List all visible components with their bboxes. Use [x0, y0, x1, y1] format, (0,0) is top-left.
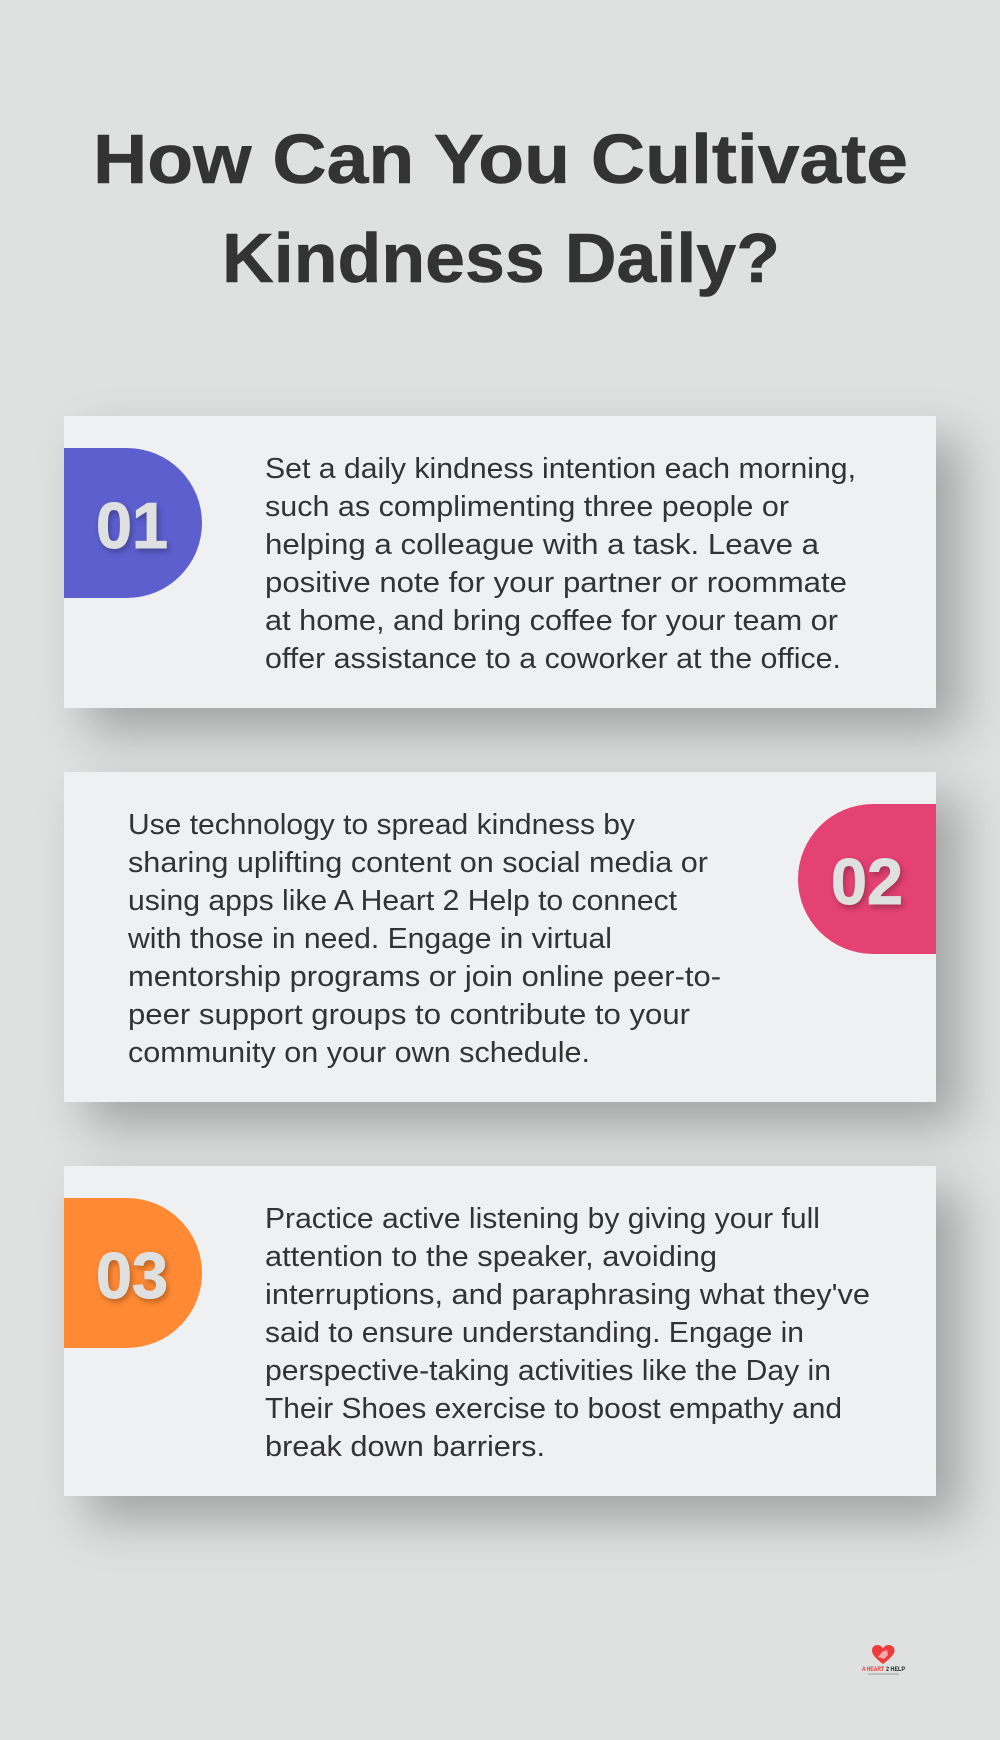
panel: step 02 — [64, 772, 936, 1102]
text: step 03 body — [265, 1203, 870, 1463]
text: step 01 body: Set a daily kindness intention each morning, — [265, 453, 856, 485]
text: step 01 body: such as complimenting three people or — [265, 491, 790, 523]
text: step 02 body: using apps like A Heart 2 Help to connect — [128, 885, 677, 917]
text: step 03 body: said to ensure understanding. Engage in — [265, 1317, 804, 1349]
logo: A Heart 2 Help: 2 HELP — [886, 1667, 905, 1673]
text: step 01 body: positive note for your partner or roommate — [265, 567, 847, 599]
badge: 03: 03 — [96, 1239, 168, 1312]
badge: 02 — [798, 804, 936, 954]
title — [93, 120, 908, 297]
badge: 03 — [64, 1198, 202, 1348]
text: step 02 body — [127, 809, 721, 1069]
text: step 03 body: Practice active listening by giving your full — [265, 1203, 820, 1235]
badge: 01: 01 — [96, 489, 168, 562]
panel: step 03 — [64, 1166, 936, 1496]
text: step 02 body: Use technology to spread kindness by — [128, 809, 636, 841]
badge: 02: 02 — [831, 845, 903, 918]
logo: A Heart 2 Help: A HEART — [862, 1667, 884, 1673]
text: step 01 body: offer assistance to a coworker at the office. — [265, 643, 841, 675]
text: step 01 body: at home, and bring coffee for your team or — [265, 605, 839, 637]
text: step 01 body — [265, 453, 856, 675]
title: Kindness Daily? — [222, 219, 780, 297]
text: step 01 body: helping a colleague with a task. Leave a — [265, 529, 819, 561]
title: How Can You Cultivate — [93, 120, 908, 198]
badge: 01 — [64, 448, 202, 598]
text: step 02 body: with those in need. Engage in virtual — [127, 923, 612, 955]
panel: step 01 — [64, 416, 936, 708]
text: step 02 body: peer support groups to contribute to your — [128, 999, 691, 1031]
text: step 03 body: attention to the speaker, avoiding — [265, 1241, 717, 1273]
text: step 02 body: sharing uplifting content on social media or — [128, 847, 709, 879]
text: step 03 body: perspective-taking activities like the Day in — [265, 1355, 831, 1387]
text: step 03 body: Their Shoes exercise to boost empathy and — [265, 1393, 842, 1425]
text: step 03 body: interruptions, and paraphrasing what they've — [265, 1279, 870, 1311]
text: step 02 body: mentorship programs or join online peer-to- — [128, 961, 721, 993]
logo: A Heart 2 Help — [862, 1645, 905, 1675]
text: step 03 body: break down barriers. — [265, 1431, 545, 1463]
text: step 02 body: community on your own schedule. — [128, 1037, 590, 1069]
